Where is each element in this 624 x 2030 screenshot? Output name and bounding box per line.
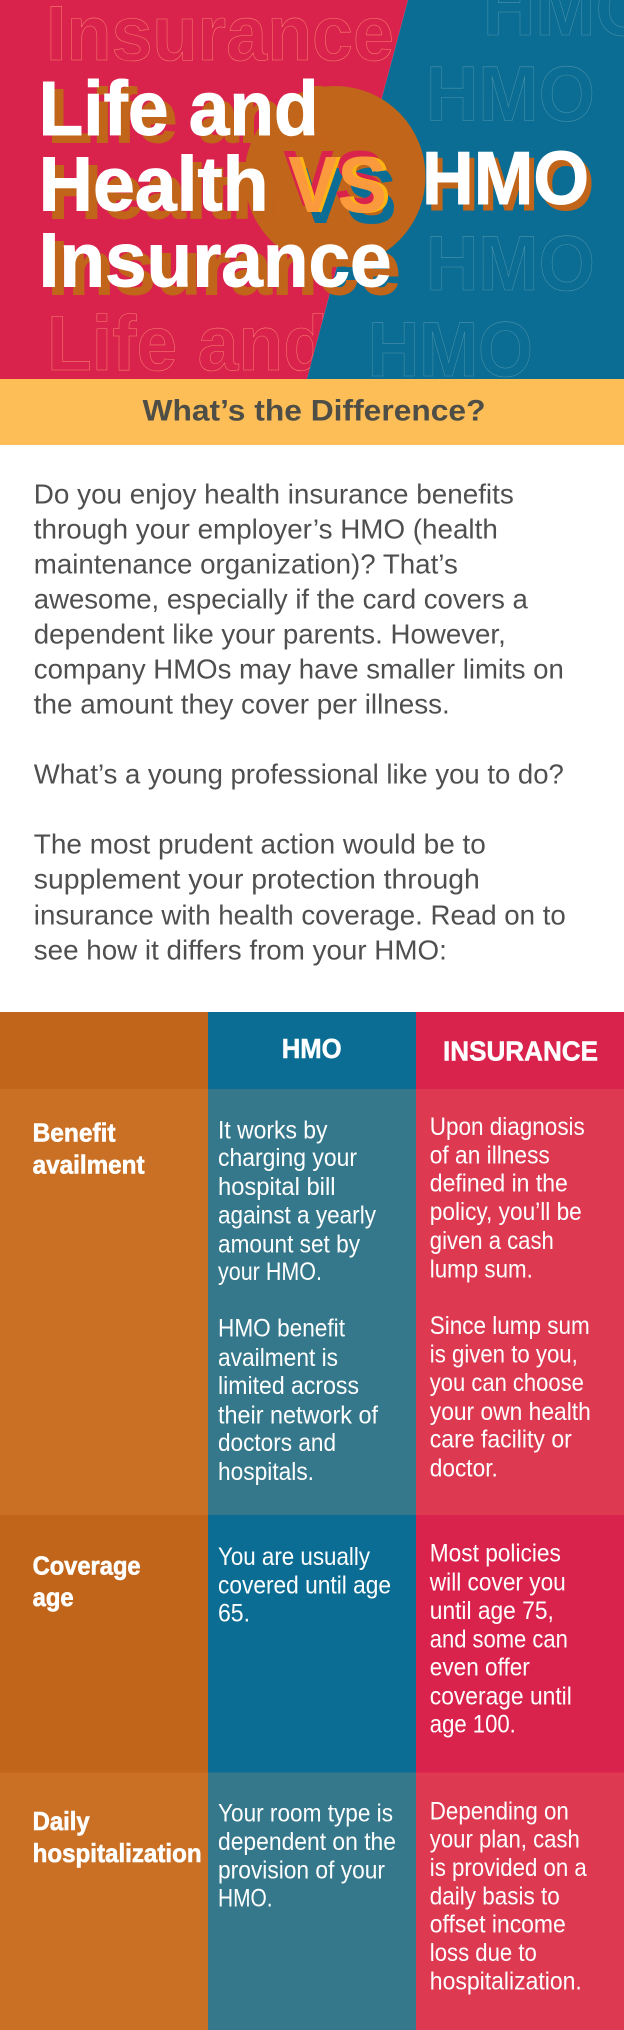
intro text block: company HMOs may have smaller limits on bbox=[34, 653, 564, 684]
intro text block: awesome, especially if the card covers a bbox=[34, 583, 528, 614]
row: benefit availment: doctor. bbox=[430, 1455, 498, 1483]
row: coverage age: will cover you bbox=[429, 1569, 566, 1597]
outlined background words: HMO side: HMO bbox=[426, 50, 595, 138]
row: benefit availment: against a yearly bbox=[218, 1201, 376, 1229]
row: daily hospitalization: HMO. bbox=[218, 1885, 273, 1913]
outlined background words: insurance side bbox=[46, 0, 394, 387]
row: benefit availment: hospitals. bbox=[218, 1458, 314, 1486]
VS badge text: VS bbox=[283, 134, 385, 223]
row: coverage age: until age 75, bbox=[430, 1597, 554, 1625]
title shadow: HMO bbox=[427, 142, 594, 226]
panel: blue HMO side bbox=[307, 0, 624, 379]
row: daily hospitalization: Your room type is bbox=[218, 1800, 393, 1828]
row: daily hospitalization: your plan, cash bbox=[430, 1825, 580, 1853]
VS badge text: VS bbox=[288, 140, 387, 229]
outlined background words: HMO side bbox=[368, 0, 624, 393]
row: benefit availment: Since lump sum bbox=[430, 1312, 590, 1340]
row: daily hospitalization: hospitalization. bbox=[430, 1967, 582, 1995]
table header row: INSURANCE bbox=[443, 1036, 598, 1067]
row: daily hospitalization: is provided on a bbox=[430, 1854, 587, 1882]
intro text block: supplement your protection through bbox=[34, 863, 480, 894]
row: coverage age: covered until age bbox=[218, 1571, 391, 1599]
row: benefit availment: limited across bbox=[218, 1372, 359, 1400]
row: benefit availment: policy, you’ll be bbox=[430, 1198, 582, 1226]
subtitle text: What’s the Difference? bbox=[142, 395, 486, 428]
row: benefit availment: care facility or bbox=[430, 1426, 572, 1454]
row: coverage age: Most policies bbox=[430, 1540, 561, 1568]
row: coverage age: Coverage bbox=[33, 1550, 141, 1580]
table header row: HMO bbox=[282, 1033, 342, 1064]
row: daily hospitalization: provision of your bbox=[218, 1856, 385, 1884]
row: benefit availment: given a cash bbox=[430, 1227, 554, 1255]
title: Life and Health Insurance: Health bbox=[39, 142, 269, 228]
VS badge text: VS bbox=[291, 140, 391, 229]
row: benefit availment: your HMO. bbox=[218, 1258, 322, 1286]
row: benefit availment bbox=[0, 1089, 624, 1515]
row: coverage age bbox=[0, 1515, 624, 1772]
header banner bbox=[0, 0, 624, 393]
row: daily hospitalization bbox=[0, 1772, 624, 2030]
intro text block: dependent like your parents. However, bbox=[34, 618, 506, 649]
intro text block: The most prudent action would be to bbox=[34, 828, 486, 859]
row: benefit availment: HMO benefit bbox=[218, 1315, 345, 1343]
outlined background words: insurance side: Life and bbox=[47, 299, 328, 387]
title shadow: Health bbox=[48, 149, 278, 235]
intro text block: the amount they cover per illness. bbox=[34, 688, 450, 719]
row: coverage age: 65. bbox=[218, 1600, 250, 1628]
outlined background words: HMO side: HMO bbox=[368, 305, 533, 393]
row: benefit availment: availment bbox=[33, 1149, 145, 1179]
row: coverage age: and some can bbox=[430, 1625, 568, 1653]
row: coverage age: even offer bbox=[430, 1654, 530, 1682]
title: HMO: HMO bbox=[422, 136, 589, 220]
row: benefit availment: of an illness bbox=[430, 1141, 550, 1169]
intro text block: maintenance organization)? That’s bbox=[34, 549, 458, 580]
title: Life and Health Insurance: Life and bbox=[39, 66, 319, 152]
panel: red insurance side bbox=[0, 0, 408, 379]
row: benefit availment: is given to you, bbox=[430, 1341, 578, 1369]
row: benefit availment: availment is bbox=[218, 1344, 338, 1372]
intro text block bbox=[34, 479, 566, 965]
row: coverage age: You are usually bbox=[218, 1543, 370, 1571]
row: daily hospitalization: loss due to bbox=[430, 1939, 537, 1967]
row: benefit availment: defined in the bbox=[430, 1170, 568, 1198]
outlined background words: HMO side: HMO bbox=[426, 219, 595, 307]
intro text block: What’s a young professional like you to do? bbox=[34, 758, 564, 789]
title: Life and Health Insurance: Insurance bbox=[39, 218, 392, 304]
row: daily hospitalization: dependent on the bbox=[218, 1828, 396, 1856]
row: coverage age: age bbox=[33, 1582, 74, 1612]
row: benefit availment: It works by bbox=[218, 1116, 328, 1144]
comparison table bbox=[0, 1012, 624, 2030]
row: benefit availment: lump sum. bbox=[430, 1255, 533, 1283]
row: daily hospitalization: Depending on bbox=[430, 1797, 569, 1825]
row: benefit availment: doctors and bbox=[218, 1429, 336, 1457]
intro text block: through your employer’s HMO (health bbox=[34, 513, 498, 544]
row: coverage age: coverage until bbox=[430, 1682, 572, 1710]
title shadow: Life and bbox=[48, 74, 328, 160]
subtitle band bbox=[0, 379, 624, 445]
row: benefit availment: charging your bbox=[218, 1144, 357, 1172]
row: benefit availment: Upon diagnosis bbox=[430, 1113, 585, 1141]
title shadow: Insurance bbox=[48, 225, 401, 311]
row: benefit availment: amount set by bbox=[218, 1230, 360, 1258]
VS badge text: VS bbox=[295, 151, 397, 240]
title: Life and Health Insurance bbox=[39, 66, 392, 304]
intro text block: insurance with health coverage. Read on to bbox=[34, 899, 566, 930]
row: daily hospitalization: Daily bbox=[33, 1806, 90, 1836]
row: daily hospitalization: daily basis to bbox=[430, 1882, 560, 1910]
row: benefit availment: you can choose bbox=[430, 1369, 584, 1397]
row: benefit availment: your own health bbox=[430, 1398, 591, 1426]
intro text block: see how it differs from your HMO: bbox=[34, 934, 447, 965]
row: benefit availment: their network of bbox=[218, 1401, 378, 1429]
row: daily hospitalization: hospitalization bbox=[33, 1838, 202, 1868]
row: coverage age: age 100. bbox=[430, 1711, 516, 1739]
row: daily hospitalization: offset income bbox=[430, 1911, 566, 1939]
table header row bbox=[0, 1012, 624, 1089]
row: benefit availment: hospital bill bbox=[218, 1173, 336, 1201]
title shadow bbox=[48, 74, 594, 311]
orange circle behind VS bbox=[244, 86, 426, 267]
row: benefit availment: Benefit bbox=[33, 1118, 116, 1148]
intro text block: Do you enjoy health insurance benefits bbox=[34, 479, 514, 510]
